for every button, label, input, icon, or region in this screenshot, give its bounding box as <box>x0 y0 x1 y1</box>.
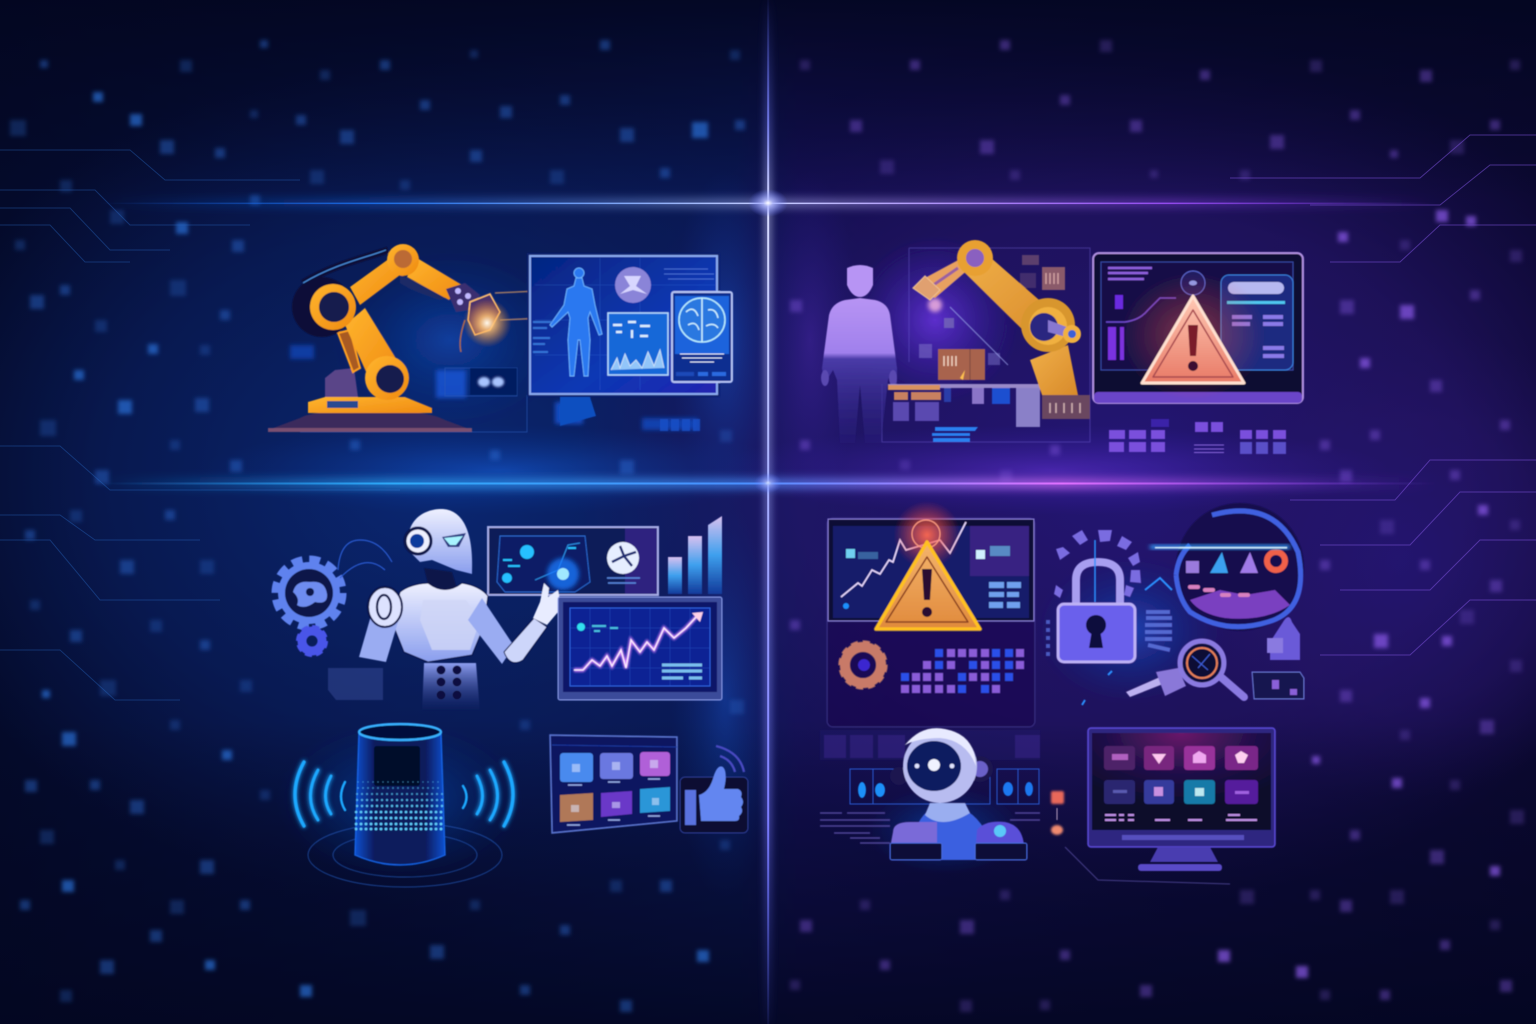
icon: astronaut style robot <box>890 728 1027 860</box>
icon: yellow robot arm <box>913 240 1081 395</box>
screen: map dashboard <box>488 527 658 595</box>
icon: small thumb block <box>1267 617 1300 660</box>
icon: human body <box>550 268 602 376</box>
readouts <box>843 546 1021 609</box>
icon: small card <box>1252 672 1304 699</box>
floating particles: right side <box>790 40 1524 1012</box>
screen: app tiles <box>550 735 677 833</box>
small scan panel <box>608 313 668 375</box>
circuit lines: left <box>0 150 400 700</box>
boxes behind arm <box>919 255 1065 365</box>
conveyor table <box>888 384 1090 442</box>
icon: circle dashboard <box>1176 503 1304 631</box>
panel: bottom right, security icons <box>1035 503 1304 705</box>
icon: orange robot arm <box>268 244 500 432</box>
line chart with warning <box>841 522 966 597</box>
background light blocks <box>290 345 698 430</box>
floating particles: left side <box>10 40 745 1012</box>
panel: top right, worker, robot arm and warning monitor <box>821 235 1303 454</box>
icon: magnifier and key <box>1126 641 1244 697</box>
panel: bottom left, robot with charts <box>275 509 722 712</box>
brain tablet <box>672 292 732 382</box>
flare line <box>1150 545 1290 549</box>
panel: bottom left, voice speaker and app screen <box>275 720 748 887</box>
screen: line chart <box>558 597 722 700</box>
equalizer blocks <box>660 419 700 431</box>
circuit lines: right <box>1230 135 1536 655</box>
monitor stand <box>560 397 596 426</box>
monitor: warning <box>1093 253 1303 403</box>
spark at gripper <box>463 299 511 347</box>
icon: small eyes readout <box>470 368 517 395</box>
icon: dashed gauge arc <box>1054 530 1141 598</box>
panel: top left, medical robot arm and monitor <box>268 244 732 432</box>
connector frame <box>300 368 527 432</box>
sparks <box>1082 671 1112 705</box>
bar chart: rising <box>668 516 722 594</box>
icon: box on conveyor <box>938 349 985 380</box>
icon: small gear <box>298 627 326 655</box>
monitor: medical scan <box>527 253 732 397</box>
monitor: app tiles <box>1088 728 1275 871</box>
icon: padlock <box>1058 540 1135 662</box>
data lines left <box>533 322 553 352</box>
icon: thumbs up <box>680 746 748 833</box>
icon: white robot <box>359 509 560 712</box>
crossing flares <box>748 189 788 493</box>
icon: copper gear <box>840 642 886 688</box>
small bars around lock <box>1046 622 1050 654</box>
glowing horizontal axis: middle <box>100 480 1436 487</box>
icon: red indicator lights <box>1051 791 1064 835</box>
icon: human silhouette <box>821 265 897 443</box>
glowing vertical axis <box>765 0 771 1024</box>
icon: warning triangle orange <box>876 501 980 629</box>
icon: warning triangle <box>1118 270 1268 400</box>
panel: bottom right, warning dashboard <box>827 501 1035 727</box>
rings under speaker <box>308 823 502 887</box>
frame lines <box>882 248 1090 442</box>
info card <box>1221 275 1293 370</box>
block groups below monitor <box>1109 419 1286 454</box>
icon: sound waves <box>295 762 513 826</box>
data grid <box>901 649 1024 693</box>
side console <box>328 668 383 700</box>
decorative arcs <box>338 540 392 578</box>
icon: anatomy circle <box>615 267 651 303</box>
icon: large gear <box>275 559 343 627</box>
background schematic <box>820 730 1040 843</box>
glowing horizontal axis: top <box>100 201 1436 205</box>
icon: smart speaker <box>355 724 445 865</box>
panel: bottom right, small robot <box>820 728 1275 884</box>
